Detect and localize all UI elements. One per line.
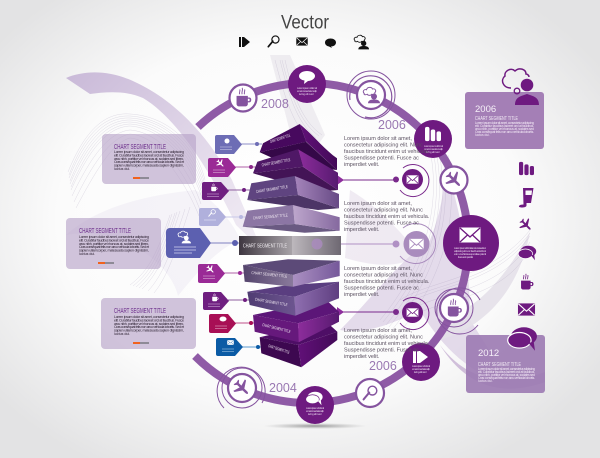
icon: large bubbles <box>508 327 537 351</box>
node: bars: amet consectetur adip <box>424 147 444 151</box>
years: 2004 <box>269 381 297 395</box>
panel: left middle: CHART SEGMENT TITLE <box>79 226 131 235</box>
text block 2: faucibus tincidunt enim ut vehicula. <box>344 214 430 220</box>
block 1: CHART SEGMENT TITLE <box>269 133 291 144</box>
panel: left middle: elit. Curabitur faucibus laoreet orci at faucibus. Fusce <box>79 238 149 242</box>
panel: left middle: luctus dui. <box>79 252 95 256</box>
node: big mail: fusce ac imperdiet <box>458 255 473 259</box>
tag 8 <box>209 314 236 333</box>
icon: play <box>239 37 250 47</box>
top icon row <box>239 35 369 49</box>
block 6: CHART SEGMENT TITLE <box>251 270 288 279</box>
text block 2: Lorem ipsum dolor sit amet, <box>344 201 412 207</box>
text block 3: imperdiet velit. <box>344 292 380 298</box>
tag 6 <box>198 264 225 283</box>
panel: left top: CHART SEGMENT TITLE <box>114 142 166 151</box>
panel: right 2012: arcu nibh, porttitor vel rhoncus at, sodales sed <box>478 373 535 377</box>
node: big mail: enim ut vehicula suspendisse potenti <box>454 252 486 256</box>
block 6 <box>243 259 340 287</box>
background waves <box>66 55 545 389</box>
icon: mail <box>296 37 308 46</box>
shadow under ring <box>263 423 367 429</box>
block 5 centre: CHART SEGMENT TITLE <box>243 244 287 250</box>
panel: left middle: sapien ullamcorper, malesuada sapien dignissim, <box>79 249 149 253</box>
panel: right 2012: Lorem ipsum dolor sit amet, consectetur adipiscing <box>478 367 535 371</box>
icon: music note <box>519 188 534 208</box>
panel: right 2006: Cras consequat felis non arcu vehicula lobortis. <box>475 130 534 134</box>
panel: right 2012: luctus dui. <box>478 379 493 383</box>
tag 3 <box>202 182 229 200</box>
block 4 <box>243 205 340 233</box>
block 9 <box>260 322 337 367</box>
tag 5 <box>166 228 211 258</box>
icon: speech <box>325 38 336 48</box>
node: play: Lorem ipsum dolor sit <box>412 364 430 368</box>
node: speech: amet consectetur adip <box>297 89 318 93</box>
panel: left bottom: arcu nibh, porttitor vel rhoncus at, sodales sed libero. <box>114 322 184 326</box>
text block 4: consectetur adipiscing elit. Nunc <box>344 334 423 340</box>
text block 1: Suspendisse potenti. Fusce ac <box>344 156 419 162</box>
panel: right 2012: CHART SEGMENT TITLE <box>478 362 521 368</box>
text block 2: imperdiet velit. <box>344 227 380 233</box>
side mail 2 <box>400 224 436 264</box>
icon: plane <box>517 216 535 234</box>
block 2: CHART SEGMENT TITLE <box>261 157 291 167</box>
text block 2: Suspendisse potenti. Fusce ac <box>344 220 419 226</box>
text block 2: consectetur adipiscing elit. Nunc <box>344 208 423 214</box>
icon: cup <box>521 274 533 290</box>
tag 9 <box>216 338 243 356</box>
node: plane <box>440 166 468 194</box>
text block 4: faucibus tincidunt enim ut vehicula. <box>344 341 430 347</box>
panel: right 2012: Cras consequat felis non arcu vehicula lobortis. <box>478 376 535 380</box>
years: 2006 <box>378 118 406 132</box>
connectors: stack to mail nodes <box>337 175 400 317</box>
node: play <box>402 343 440 381</box>
text block 4: Suspendisse potenti. Fusce ac <box>344 348 419 354</box>
connectors: tags to stack <box>210 142 262 349</box>
panel: left top <box>102 134 196 184</box>
text block 1: imperdiet velit. <box>344 162 380 168</box>
text block 1: faucibus tincidunt enim ut vehicula. <box>344 149 430 155</box>
panel: left bottom: CHART SEGMENT TITLE <box>114 306 166 315</box>
text block 1: Lorem ipsum dolor sit amet, <box>344 136 412 142</box>
panel: right 2012: elit. Curabitur faucibus laoreet orci at faucibus. <box>478 370 535 374</box>
panel: left top: sapien ullamcorper, malesuada sapien dignissim, <box>114 164 184 168</box>
title: Vector <box>281 12 330 34</box>
tag 2 <box>208 158 236 177</box>
panel: left middle: arcu nibh, porttitor vel rhoncus at, sodales sed libero. <box>79 242 149 246</box>
panel: left bottom: Lorem ipsum dolor sit amet, consectetur adipiscing <box>114 315 184 319</box>
side mail 3 <box>400 298 429 330</box>
node: play: iscing elit nunc <box>414 370 428 374</box>
panel: left middle: Cras consequat felis non arcu vehicula lobortis. Sed et <box>79 245 149 249</box>
block 4: CHART SEGMENT TITLE <box>253 212 288 220</box>
text block 4: Lorem ipsum dolor sit amet, <box>344 328 412 334</box>
icon: cloud person <box>354 35 369 49</box>
text block 3: faucibus tincidunt enim ut vehicula. <box>344 279 430 285</box>
tags <box>166 135 243 356</box>
panel: left top: luctus dui. <box>114 167 130 171</box>
node: cloud person <box>347 71 395 119</box>
panel: left bottom: sapien ullamcorper, malesuada sapien dignissim, <box>114 329 184 333</box>
panel: right 2006 <box>465 92 544 149</box>
block 3 <box>247 176 339 210</box>
icon: bars <box>519 162 534 175</box>
panel: right 2006: CHART SEGMENT TITLE <box>475 116 518 122</box>
panel: left bottom: Cras consequat felis non arcu vehicula lobortis. Sed et <box>114 325 184 329</box>
text block 1 <box>344 136 430 168</box>
node: plane with rings <box>217 367 265 408</box>
panel: right 2006: arcu nibh, porttitor vel rhoncus at, sodales sed <box>475 127 534 131</box>
panel: left top: arcu nibh, porttitor vel rhoncus at, sodales sed libero. <box>114 157 184 161</box>
node: speech bottom <box>296 386 334 424</box>
panel: right 2006: Lorem ipsum dolor sit amet, consectetur adipiscing <box>475 121 534 125</box>
text block 4 <box>344 328 430 360</box>
node: big mail: adipiscing elit nunc faucibus tincidunt <box>454 249 486 253</box>
panel: left middle: Lorem ipsum dolor sit amet, consectetur adipiscing <box>79 235 149 239</box>
panel: left bottom: elit. Curabitur faucibus laoreet orci at faucibus. Fusce <box>114 318 184 322</box>
tag 4 <box>199 208 226 226</box>
icon: cloud person on panel <box>503 69 539 105</box>
block 9: CHART SEGMENT TITLE <box>268 343 290 355</box>
node: bars <box>414 120 452 158</box>
node: speech bottom: amet consectetur adip <box>306 409 324 413</box>
node: cup <box>230 84 256 112</box>
icon: search <box>268 36 279 47</box>
text block 1: consectetur adipiscing elit. Nunc <box>344 142 423 148</box>
panel: left top: elit. Curabitur faucibus laoreet orci at faucibus. Fusce <box>114 153 184 157</box>
text block 3 <box>344 266 430 298</box>
tag 1 <box>215 135 242 154</box>
node: cup with rings <box>435 288 480 334</box>
panel: right 2012 <box>466 335 545 393</box>
text block 4: imperdiet velit. <box>344 354 380 360</box>
block 2 <box>253 149 338 192</box>
years <box>261 97 406 395</box>
node: speech: iscing elit nunc <box>299 92 315 96</box>
block 8: CHART SEGMENT TITLE <box>262 322 291 334</box>
years: 2008 <box>261 97 289 111</box>
stack blocks <box>239 124 341 367</box>
icon: mail <box>518 303 535 316</box>
node: big mail <box>443 215 499 271</box>
panel: left top: Cras consequat felis non arcu vehicula lobortis. Sed et <box>114 160 184 164</box>
panel: left top: Lorem ipsum dolor sit amet, consectetur adipiscing <box>114 150 184 154</box>
panel: left middle <box>66 218 161 269</box>
side mail 1 <box>400 165 429 197</box>
node: play: amet consectetur adip <box>412 367 430 371</box>
node: speech bottom: iscing elit nunc <box>308 412 323 416</box>
node: speech bottom: Lorem ipsum dolor sit <box>306 406 324 410</box>
node: speech: Lorem ipsum dolor sit <box>297 86 317 90</box>
years: 2006 <box>369 359 397 373</box>
right icon column <box>508 162 537 351</box>
node: search <box>356 379 384 407</box>
panel: left bottom: luctus dui. <box>114 332 130 336</box>
block 3: CHART SEGMENT TITLE <box>256 184 288 194</box>
panel: right 2006: elit. Curabitur faucibus laoreet orci at faucibus. <box>475 124 534 128</box>
panel: right 2006: 2006 <box>475 104 496 115</box>
node: big mail: Lorem ipsum dolor sit amet consectetur <box>454 246 486 250</box>
ring <box>195 83 468 403</box>
text block 3: Suspendisse potenti. Fusce ac <box>344 286 419 292</box>
text block 3: consectetur adipiscing elit. Nunc <box>344 272 423 278</box>
panel: right 2012: 2012 <box>478 348 499 359</box>
lorem text blocks <box>344 136 430 360</box>
block 1 <box>260 124 337 170</box>
node: bars: Lorem ipsum dolor sit <box>424 144 443 148</box>
block 7: CHART SEGMENT TITLE <box>255 297 288 307</box>
block 5 centre <box>239 236 341 255</box>
panel: left bottom <box>101 298 196 349</box>
node: bars: iscing elit nunc <box>426 150 441 154</box>
icon: bubbles <box>518 246 536 260</box>
text block 2 <box>344 201 430 233</box>
block 7 <box>247 282 339 316</box>
block 8 <box>253 300 339 342</box>
node: speech <box>288 65 326 103</box>
panel: right 2006: luctus dui. <box>475 133 490 137</box>
text block 3: Lorem ipsum dolor sit amet, <box>344 266 412 272</box>
tag 7 <box>203 292 229 310</box>
